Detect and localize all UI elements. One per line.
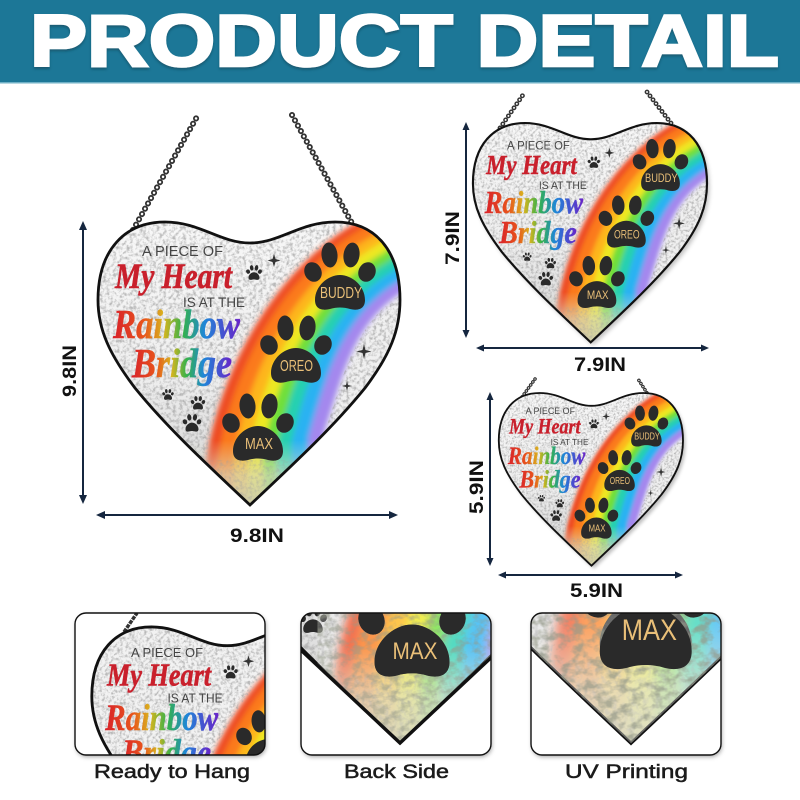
heart close-up: A PIECE OF xyxy=(131,645,203,660)
caption: ready to hang: Ready to Hang xyxy=(94,762,250,783)
heart text xyxy=(112,243,362,453)
heart tip close-up: MAX xyxy=(392,638,438,665)
heart close-up: My Heart xyxy=(106,657,212,693)
dimension: small width xyxy=(498,572,683,602)
detail panel: ready to hang xyxy=(73,612,269,760)
caption: back side: Back Side xyxy=(344,762,449,783)
heart text: MAX xyxy=(245,436,273,453)
dimension: medium height: 7.9IN xyxy=(443,211,464,265)
heart text: MAX xyxy=(587,288,609,302)
heart text: Rainbow xyxy=(484,185,584,220)
heart suncatcher xyxy=(467,106,738,354)
heart close-up: IS AT THE xyxy=(167,692,223,706)
dimension: large width xyxy=(96,511,398,547)
heart text: Rainbow xyxy=(507,443,586,470)
heart text: MAX xyxy=(588,523,606,534)
heart tip close-up xyxy=(532,614,720,746)
heart text xyxy=(484,139,678,302)
dimension: medium width: 7.9IN xyxy=(574,355,626,376)
header banner xyxy=(0,0,800,84)
dimension: small height xyxy=(467,392,494,566)
hanging chain xyxy=(522,379,649,397)
heart text: Bridge xyxy=(131,340,232,386)
heart text: My Heart xyxy=(508,413,581,438)
heart suncatcher xyxy=(494,380,707,575)
heart close-up: Bridge xyxy=(121,732,211,773)
hanging chain xyxy=(500,92,674,128)
heart suncatcher xyxy=(90,200,440,520)
medium 7.9in heart panel xyxy=(467,92,738,354)
heart tip close-up: MAX xyxy=(622,614,677,647)
heart text: My Heart xyxy=(114,256,233,296)
heart text: A PIECE OF xyxy=(507,139,570,152)
heart close-up: Rainbow xyxy=(104,697,219,738)
heart text: A PIECE OF xyxy=(526,406,575,416)
dimension: large height xyxy=(60,221,87,504)
heart text: Rainbow xyxy=(112,301,241,347)
heart text: IS AT THE xyxy=(539,180,587,192)
dimension: large height: 9.8IN xyxy=(60,345,81,397)
small 5.9in heart panel xyxy=(494,379,707,575)
heart text: Bridge xyxy=(498,215,577,250)
heart close-up xyxy=(90,626,264,754)
heart text: A PIECE OF xyxy=(142,243,223,260)
heart text: My Heart xyxy=(485,150,578,181)
hanging chain xyxy=(133,115,353,230)
dimension: medium height xyxy=(443,122,470,338)
heart text xyxy=(507,406,660,534)
dimension: medium width xyxy=(476,344,709,376)
heart text: BUDDY xyxy=(645,171,678,185)
detail panel: back side xyxy=(299,612,495,760)
dimension: large width: 9.8IN xyxy=(230,526,284,547)
detail panel: uv printing xyxy=(529,612,725,760)
heart text: IS AT THE xyxy=(551,437,589,447)
heart text: IS AT THE xyxy=(183,294,245,310)
dimension: small width: 5.9IN xyxy=(570,581,623,602)
caption: uv printing: UV Printing xyxy=(565,762,688,783)
heart tip close-up xyxy=(302,614,490,746)
large 9.8in heart panel xyxy=(90,115,440,520)
heart text: Bridge xyxy=(519,467,581,494)
heart text: OREO xyxy=(610,476,630,487)
heart text: OREO xyxy=(614,228,640,242)
dimension: small height: 5.9IN xyxy=(467,460,488,514)
title: PRODUCT DETAIL xyxy=(30,1,779,82)
heart text: OREO xyxy=(280,358,313,375)
heart text: BUDDY xyxy=(320,285,362,302)
heart text: BUDDY xyxy=(634,431,660,442)
